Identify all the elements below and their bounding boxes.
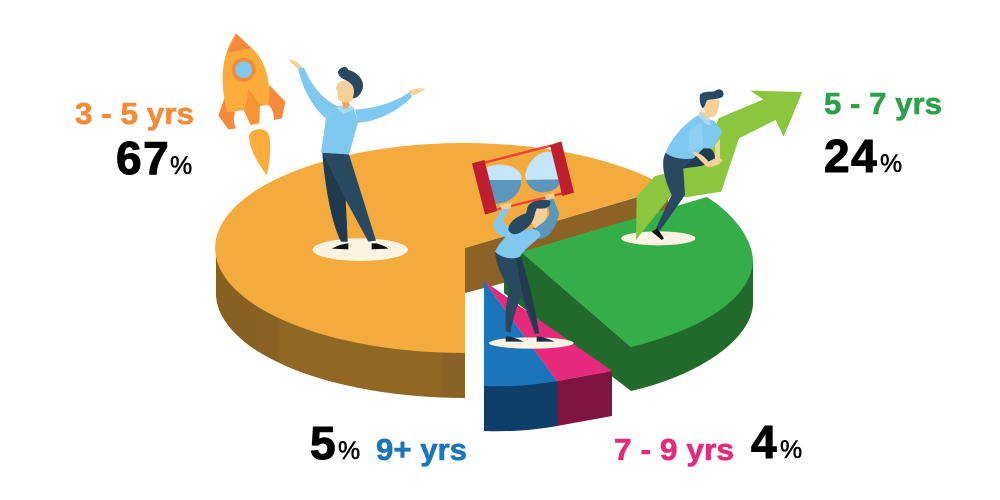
figure: man with raised arms bbox=[289, 59, 425, 261]
value: 24%: 24 bbox=[824, 130, 878, 182]
icon: hourglass bbox=[472, 141, 574, 215]
label: 5-7 yrs: 5 - 7 yrs bbox=[824, 86, 942, 121]
value: 24%: % bbox=[880, 150, 902, 178]
slice: 9+ yrs blue bbox=[484, 281, 557, 431]
value: 67%: % bbox=[170, 152, 192, 180]
value: 67%: 67 bbox=[116, 132, 170, 184]
value: 4%: % bbox=[780, 436, 802, 464]
3D pie chart bbox=[215, 143, 753, 431]
figure: woman lifting hourglass bbox=[472, 141, 574, 349]
slice: 3-5 yrs orange bbox=[215, 143, 668, 398]
slice: 7-9 yrs pink bbox=[484, 281, 612, 426]
slice: 5-7 yrs green bbox=[504, 197, 753, 391]
figure: man riding green arrow bbox=[621, 89, 802, 245]
label: 3-5 yrs: 3 - 5 yrs bbox=[75, 96, 194, 131]
value: 5%: 5 bbox=[310, 417, 336, 469]
label: 9+ yrs: 9+ yrs bbox=[376, 432, 467, 467]
label: 7-9 yrs: 7 - 9 yrs bbox=[614, 432, 734, 467]
value: 4%: 4 bbox=[751, 416, 777, 468]
icon: rocket bbox=[218, 33, 285, 175]
value: 5%: % bbox=[338, 437, 360, 465]
